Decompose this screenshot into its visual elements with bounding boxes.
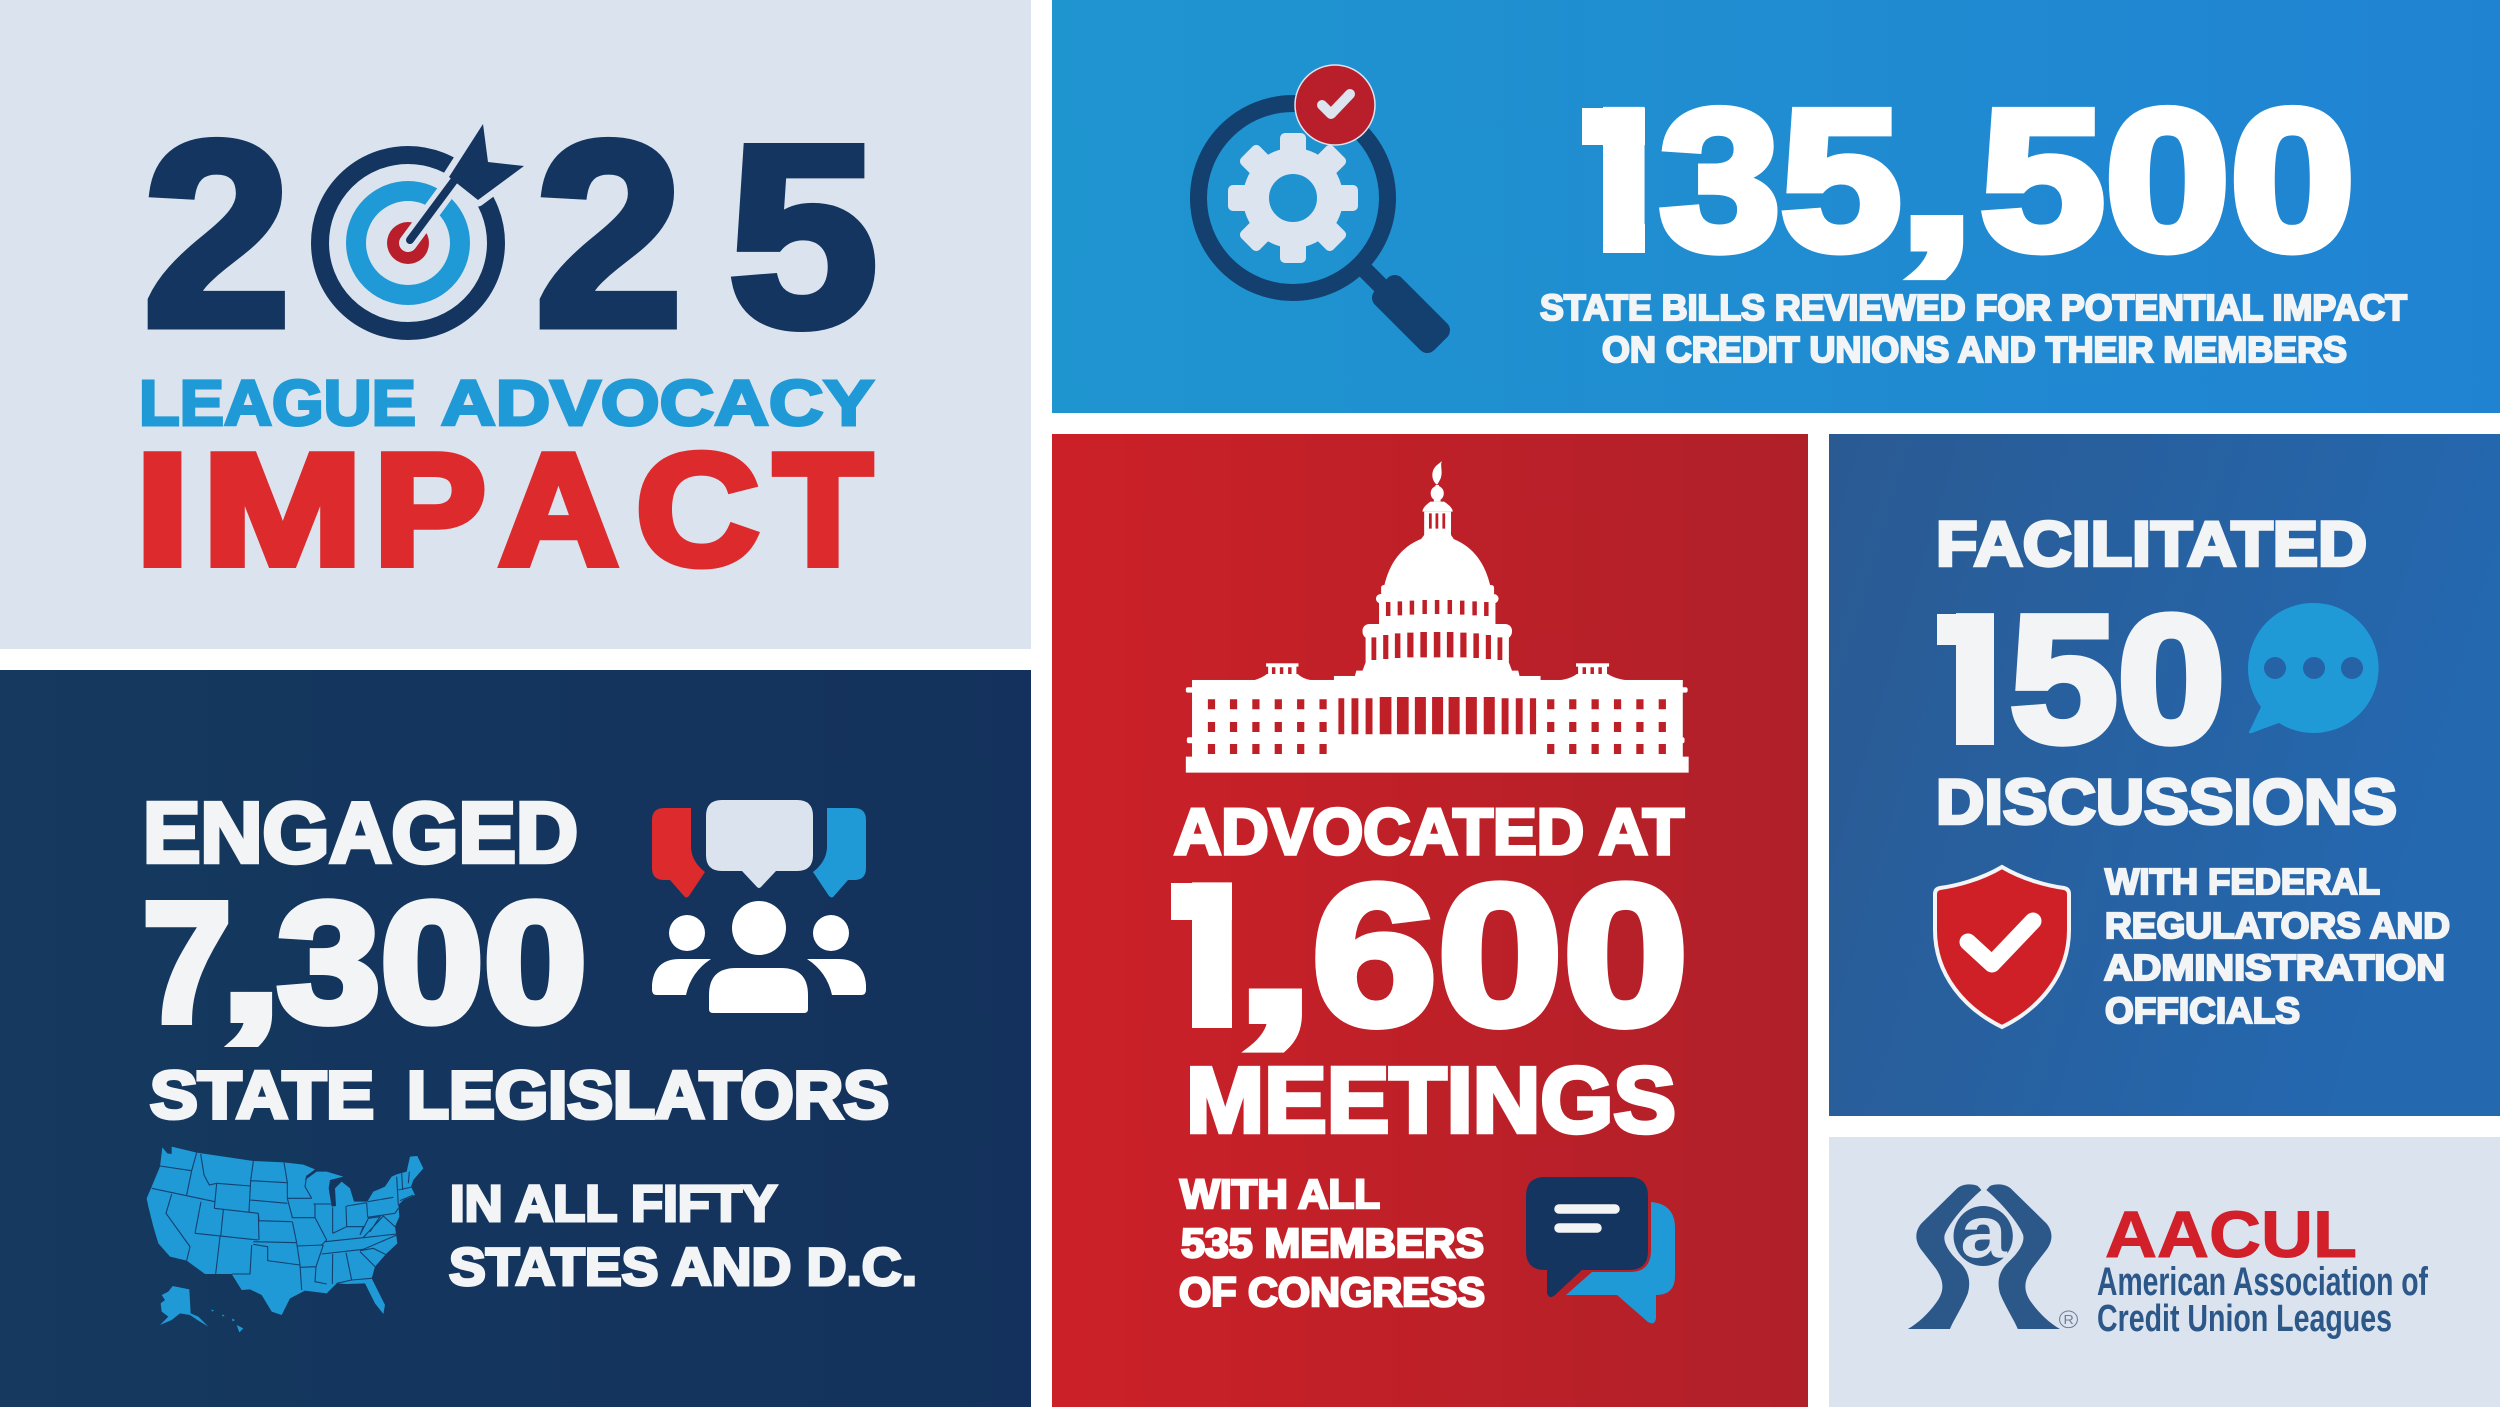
text: discussions: DISCUSSIONS <box>1936 768 2397 838</box>
panel: state legislators <box>0 670 1031 1407</box>
logo: hands and at sign: R <box>2064 1311 2074 1327</box>
heading: impact: I <box>136 422 190 598</box>
heading: impact: C <box>636 422 759 598</box>
title: 2025: 2 <box>143 87 291 381</box>
text: with federal regulators and administration officials: ADMINISTRATION <box>2104 947 2445 988</box>
text: with federal regulators and administration officials: OFFICIALS <box>2105 990 2300 1031</box>
number: 1,600: , <box>1235 854 1315 1060</box>
heading: league advocacy <box>139 367 874 439</box>
number: 150: 1 <box>1892 579 2037 780</box>
heading: league advocacy: ADVOCACY <box>441 367 874 439</box>
heading: impact: A <box>499 422 618 598</box>
heading: impact: M <box>202 422 362 598</box>
title: 2025 <box>143 87 878 381</box>
heading: impact <box>136 422 872 598</box>
text: with all 535 members of congress: OF CONGRESS <box>1179 1269 1485 1315</box>
text: state legislators <box>150 1058 889 1133</box>
text: with all 535 members of congress: WITH ALL <box>1180 1171 1380 1217</box>
text: state legislators: LEGISLATORS <box>407 1058 889 1133</box>
number: 135,500: 35 <box>1660 69 1902 292</box>
text: with federal regulators and administration officials: REGULATORS AND <box>2105 905 2450 946</box>
title: 2025: 5 <box>728 91 878 380</box>
text: meetings: MEETINGS <box>1186 1048 1676 1152</box>
text: with all 535 members of congress <box>1179 1171 1485 1315</box>
icon: chat bubbles <box>1526 1177 1675 1323</box>
number: 1,600: 600 <box>1312 844 1688 1067</box>
icon: magnifier with gear <box>1198 65 1454 357</box>
number: 135,500: 1 <box>1535 69 1690 292</box>
number: 150: 50 <box>2010 579 2225 780</box>
number: 1,600: 1 <box>1123 844 1278 1067</box>
logo: hands and at sign: a <box>1960 1192 2008 1274</box>
number: 7,300: , <box>221 879 281 1052</box>
number: 135,500: , <box>1898 81 1975 287</box>
text: state legislators: STATE <box>150 1058 374 1133</box>
text: with federal regulators and administration officials <box>2104 861 2450 1031</box>
text: in all fifty states and d.c. <box>449 1175 917 1297</box>
number: 135,500 <box>1582 104 2351 280</box>
number: 150 <box>1937 611 2222 747</box>
logo: association name <box>2097 1260 2428 1340</box>
number: 7,300: 7 <box>142 868 232 1058</box>
panel: AACUL logo <box>1829 1137 2500 1407</box>
text: state bills reviewed: STATE BILLS REVIEWED FOR POTENTIAL IMPACT <box>1540 287 2407 328</box>
title: 2025: 2 <box>535 87 683 381</box>
icon: speech bubbles and people <box>652 800 866 1013</box>
text: facilitated: FACILITATED <box>1936 510 2367 580</box>
text: state bills reviewed <box>1540 287 2407 370</box>
logo: hands and at sign <box>1908 1184 2077 1329</box>
panel: title <box>0 0 1031 649</box>
number: 7,300: 300 <box>277 868 587 1058</box>
logo: association name: Credit Union Leagues <box>2097 1298 2392 1340</box>
icon: shield with check <box>1935 867 2069 1027</box>
text: advocated at: AT <box>1599 795 1684 868</box>
text: in all fifty states and d.c.: IN ALL FIFTY <box>450 1175 777 1232</box>
heading: league advocacy: LEAGUE <box>139 367 416 439</box>
map: United States <box>147 1147 423 1332</box>
text: state bills reviewed: ON CREDIT UNIONS AND THEIR MEMBERS <box>1602 329 2347 370</box>
number: 1,600 <box>1171 880 1684 1053</box>
panel: congress meetings <box>1052 434 1808 1407</box>
text: in all fifty states and d.c.: STATES AND D.C. <box>449 1238 917 1297</box>
number: 7,300 <box>142 868 587 1058</box>
icon: capitol building <box>1186 461 1689 773</box>
text: with federal regulators and administration officials: WITH FEDERAL <box>2105 861 2380 902</box>
number: 135,500: 500 <box>1980 69 2355 292</box>
text: advocated at: ADVOCATED <box>1174 795 1584 868</box>
logo: AACUL wordmark: AACUL <box>2105 1197 2357 1271</box>
panel: state bills <box>1052 0 2500 413</box>
panel: federal discussions <box>1829 434 2500 1116</box>
heading: impact: P <box>374 422 486 598</box>
text: with all 535 members of congress: 535 MEMBERS <box>1181 1220 1484 1266</box>
text: engaged: ENGAGED <box>143 786 578 881</box>
heading: impact: T <box>774 422 872 598</box>
icon: target with arrow <box>320 124 524 331</box>
icon: speech bubble with dots <box>2248 603 2379 733</box>
